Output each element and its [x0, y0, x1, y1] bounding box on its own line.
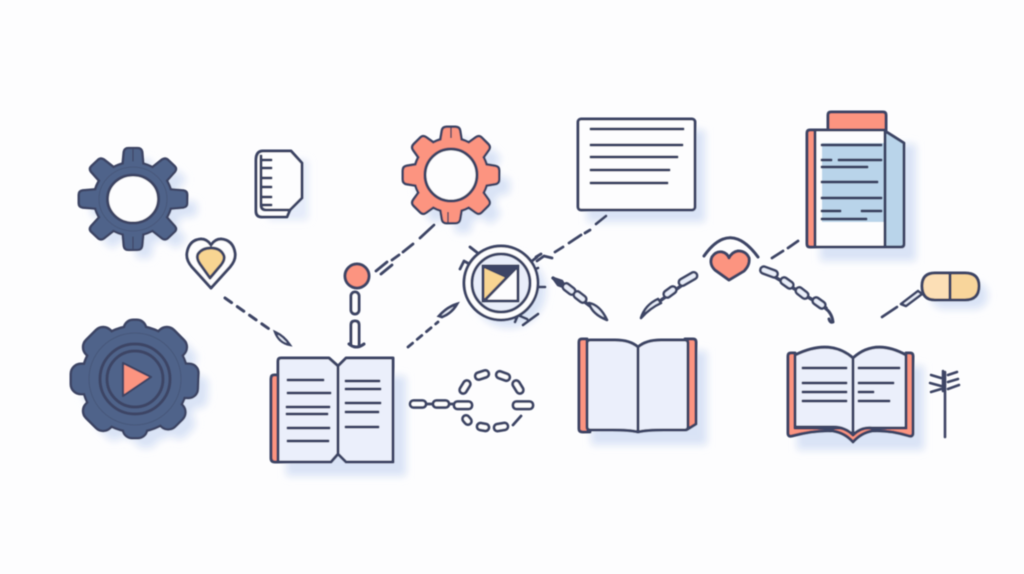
chain: target to book [553, 278, 607, 320]
icon: notepad [256, 151, 302, 217]
chain: heart to book [759, 266, 833, 322]
chain ring [410, 370, 533, 432]
gear: play button [72, 321, 198, 437]
chain: book to heart [641, 271, 698, 318]
icon: heart with arc [704, 238, 758, 280]
gear: orange [404, 128, 498, 222]
connector: heart to book [225, 298, 290, 345]
icon: pill [922, 273, 979, 300]
icon: target badge with image [460, 246, 545, 325]
icon: feather arrow [930, 371, 959, 437]
picture square [483, 266, 518, 301]
connector: target to text box [536, 216, 606, 261]
connector: orange circle to orange gear [376, 225, 434, 274]
book: middle, blank [579, 339, 696, 432]
soft drop shadows [83, 130, 988, 476]
connector: document pill [882, 291, 922, 317]
node: orange circle with arrow [345, 264, 369, 347]
book: left open with text [271, 358, 393, 462]
book: right open, curved [788, 347, 913, 442]
icon: play triangle [123, 363, 151, 396]
icon: small heart [187, 239, 235, 288]
document with tab and fold [807, 112, 904, 247]
connector: book to target [408, 304, 457, 347]
gear: dark top left [80, 149, 186, 249]
connector: heart to document [772, 241, 798, 258]
panel: text box [578, 119, 695, 210]
